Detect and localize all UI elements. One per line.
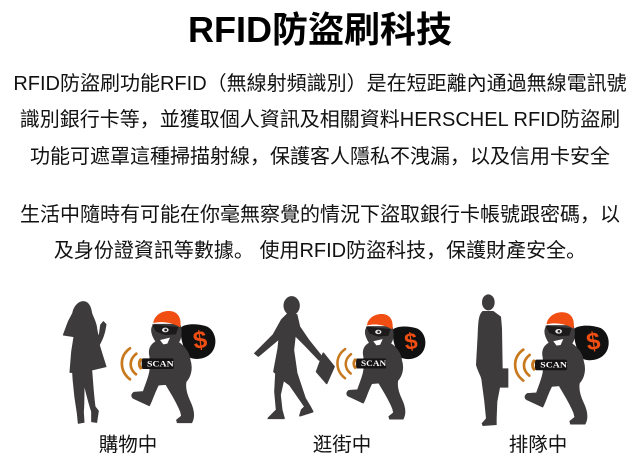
figure: thief with scanner: SCAN [540, 361, 567, 370]
figure: thief with scanner [122, 311, 215, 423]
label: shopping: 購物中 [99, 434, 157, 456]
scene: walking [255, 297, 425, 419]
figure: thief with scanner: SCAN [361, 359, 387, 368]
text block: everyday risk [20, 204, 620, 262]
text block: RFID description: RFID防盜刷功能RFID（無線射頻識別）是在短距離內通過無線電訊號 [13, 73, 627, 95]
figure: thief with scanner: $ [191, 326, 209, 355]
figure: thief with scanner: $ [403, 327, 419, 355]
figure: thief with scanner: $ [585, 328, 602, 356]
figure: thief with scanner [337, 314, 425, 419]
title: RFID防盜刷科技 [188, 9, 452, 50]
label: queueing: 排隊中 [509, 434, 567, 456]
scene: queueing [476, 294, 609, 426]
figure: thief with scanner: SCAN [147, 359, 174, 368]
scene: shopping [63, 302, 215, 423]
label: walking: 逛街中 [313, 434, 371, 456]
text block: everyday risk: 生活中隨時有可能在你毫無察覺的情況下盜取銀行卡帳號跟密碼，以 [20, 204, 620, 226]
text block: RFID description [13, 72, 627, 168]
text block: RFID description: 功能可遮罩這種掃描射線，保護客人隱私不洩漏，以及信用卡安全 [30, 146, 610, 168]
text block: RFID description: 識別銀行卡等，並獲取個人資訊及相關資料HERSCHEL RFID防盜刷 [20, 109, 620, 131]
figure: woman with bag [255, 297, 334, 418]
figure: person with briefcase [476, 294, 508, 426]
figure: thief with scanner [515, 312, 609, 424]
text block: everyday risk: 及身份證資訊等數據。 使用RFID防盜科技，保護財產安全。 [54, 240, 586, 262]
figure: woman on phone [63, 302, 106, 423]
